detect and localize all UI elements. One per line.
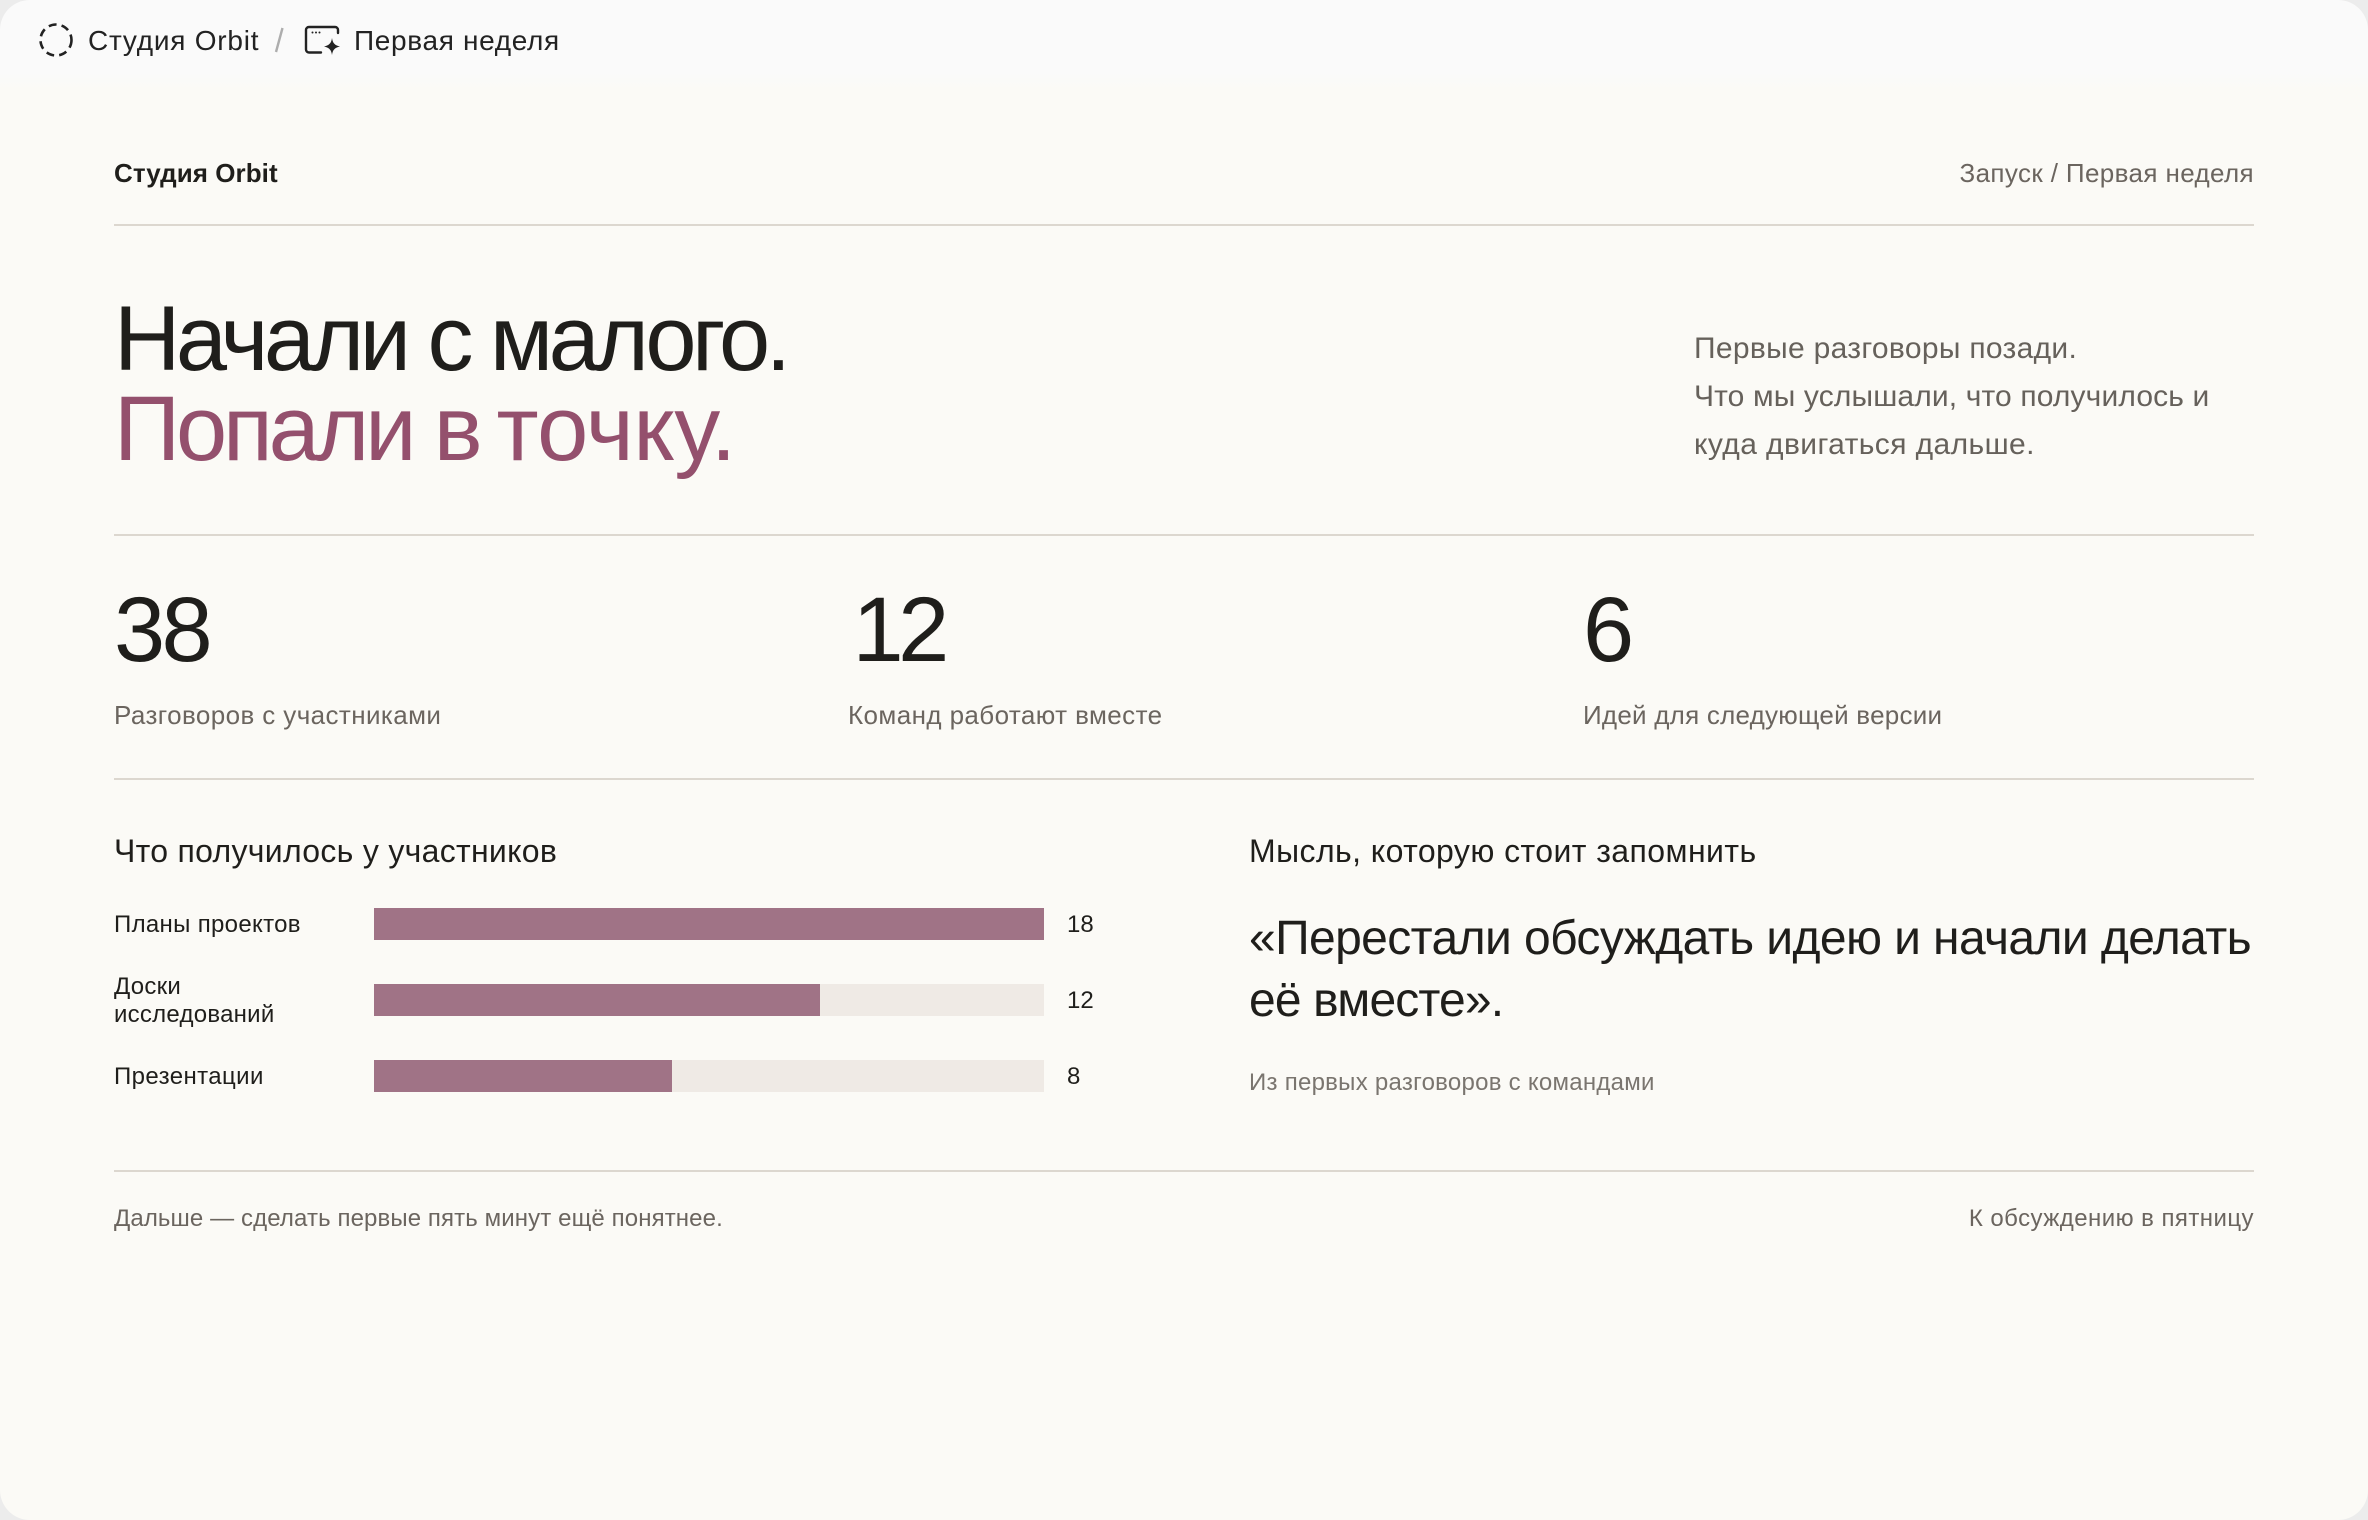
bar row: research boards xyxy=(114,973,1094,1028)
hero description: куда двигаться дальше. xyxy=(1694,428,2035,461)
row label: Презентации xyxy=(114,1063,264,1090)
row label xyxy=(114,973,274,1028)
bar xyxy=(374,984,1044,1016)
stat: ideas xyxy=(1583,579,1942,730)
bar row: project plans xyxy=(114,908,1094,940)
quote text: её вместе». xyxy=(1249,974,1503,1027)
row label: исследований xyxy=(114,1001,274,1028)
chart heading: Что получилось у участников xyxy=(114,833,557,869)
bar xyxy=(374,1060,1044,1092)
value: 38 xyxy=(114,579,209,681)
breadcrumb: page name: Первая неделя xyxy=(354,25,560,56)
caption: Команд работают вместе xyxy=(848,700,1162,730)
stat: teams xyxy=(848,579,1162,730)
hero title xyxy=(114,288,787,480)
value: 6 xyxy=(1583,579,1630,681)
bar row: presentations xyxy=(114,1060,1080,1092)
hero description: Первые разговоры позади. xyxy=(1694,332,2077,365)
hero title: Начали с малого. xyxy=(114,288,787,390)
row label: Планы проектов xyxy=(114,911,301,938)
studio name: Студия Orbit xyxy=(114,158,278,188)
quote source: Из первых разговоров с командами xyxy=(1249,1069,1655,1096)
value: 12 xyxy=(852,579,944,681)
stat: conversations xyxy=(114,579,441,730)
header: studio name and section xyxy=(114,158,2254,188)
value: 18 xyxy=(1067,911,1094,938)
footer action: К обсуждению в пятницу xyxy=(1969,1205,2254,1232)
hero title: Попали в точку. xyxy=(114,378,736,480)
quote heading: Мысль, которую стоит запомнить xyxy=(1249,833,1757,869)
breadcrumb separator xyxy=(274,28,284,52)
icon: dashed orbit circle xyxy=(39,23,73,57)
quote text: «Перестали обсуждать идею и начали делать xyxy=(1249,912,2251,965)
launch label: Запуск / Первая неделя xyxy=(1959,158,2254,188)
caption: Разговоров с участниками xyxy=(114,700,441,730)
quote text xyxy=(1249,912,2251,1027)
value: 8 xyxy=(1067,1063,1080,1090)
icon: window with sparkle xyxy=(304,26,340,55)
panel: quote xyxy=(1249,833,2251,1096)
hero description xyxy=(1694,332,2209,461)
breadcrumb: studio name: Студия Orbit xyxy=(88,25,259,56)
value: 12 xyxy=(1067,987,1094,1014)
panel: participant results chart xyxy=(114,833,1094,1092)
top breadcrumb bar xyxy=(39,23,560,57)
row label: Доски xyxy=(114,973,181,1000)
footer note: Дальше — сделать первые пять минут ещё понятнее. xyxy=(114,1205,723,1232)
caption: Идей для следующей версии xyxy=(1583,700,1942,730)
hero description: Что мы услышали, что получилось и xyxy=(1694,380,2209,413)
bar xyxy=(374,908,1044,940)
